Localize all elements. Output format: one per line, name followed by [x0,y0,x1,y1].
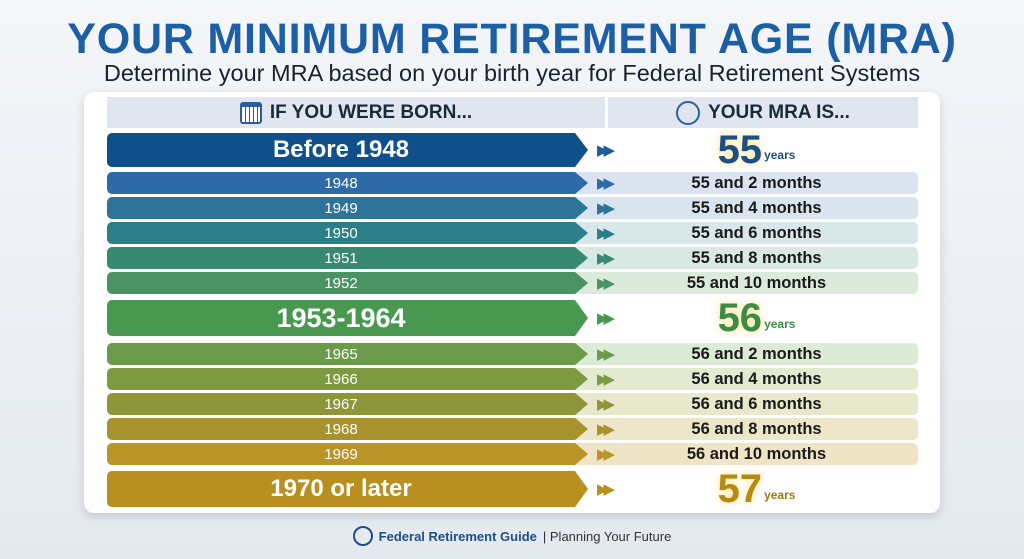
row: 1949: ▶▶ [597,200,610,217]
row: 1948: 1948 [324,174,358,192]
row: 1951 [107,247,918,269]
row: 1967: 1967 [324,396,358,412]
row: 1952: 55 and 10 months [687,274,826,292]
row: 1953-1964: ▶▶ [597,310,610,327]
row: 1953-1964: years [764,317,795,331]
row: 1952: ▶▶ [597,275,610,292]
row: 1965: 56 and 2 months [691,344,822,362]
row: before 1948: Before 1948 [273,136,409,163]
row: 1948: 55 and 2 months [691,174,822,192]
footer: | Planning Your Future [543,528,671,544]
row: before 1948 [107,128,795,172]
header: MRA: YOUR MRA IS... [708,102,850,122]
title: YOUR MINIMUM RETIREMENT AGE (MRA) [67,15,957,63]
subtitle: Determine your MRA based on your birth year for Federal Retirement Systems [104,60,920,86]
row: 1967 [107,393,918,415]
row: 1966: ▶▶ [597,371,610,388]
row: 1953-1964: 1953-1964 [276,302,406,332]
row: 1968 [107,418,918,440]
row: 1966: 56 and 4 months [691,370,822,388]
row: 1970 or later: ▶▶ [597,481,610,498]
row: 1951: ▶▶ [597,250,610,267]
row: 1952 [107,272,918,294]
row: 1949: 55 and 4 months [691,198,822,216]
row: 1968: 1968 [324,420,358,438]
row: 1952: 1952 [324,274,358,292]
header: born [107,97,605,128]
row: 1965: 1965 [324,346,358,362]
row: before 1948: years [764,148,795,162]
row: before 1948: 55 [718,128,762,172]
row: 1967: ▶▶ [597,396,610,413]
row: 1970 or later: 57 [718,466,762,510]
row: 1969: ▶▶ [597,446,610,463]
row: 1950: ▶▶ [597,225,610,242]
row: 1968: 56 and 8 months [691,420,822,438]
footer: Federal Retirement Guide [379,528,537,544]
row: 1949 [107,197,918,219]
footer [353,526,671,546]
row: 1970 or later [107,466,795,510]
row: 1953-1964: 56 [718,296,762,340]
row: 1969: 56 and 10 months [687,444,826,462]
row: 1966: 1966 [324,370,358,388]
row: 1950: 1950 [324,224,358,242]
row: 1949: 1949 [324,200,358,216]
header: MRA [608,97,918,128]
row: 1965 [107,343,918,365]
row: 1970 or later: years [764,488,795,502]
row: 1965: ▶▶ [597,346,610,363]
row: 1967: 56 and 6 months [691,394,822,412]
row: 1951: 55 and 8 months [691,248,822,266]
row: 1950: 55 and 6 months [691,224,822,242]
row: 1970 or later: 1970 or later [270,475,412,502]
row: before 1948: ▶▶ [597,142,610,159]
row: 1969 [107,443,918,465]
row: 1968: ▶▶ [597,421,610,438]
row: 1951: 1951 [324,250,358,266]
row: 1969: 1969 [324,446,358,462]
row: 1950 [107,222,918,244]
row: 1948: ▶▶ [597,175,610,192]
panel: table card [84,92,940,513]
row: 1966 [107,368,918,390]
header: born: IF YOU WERE BORN... [270,102,472,122]
row: 1953-1964 [107,296,795,340]
row: 1948 [107,172,918,194]
